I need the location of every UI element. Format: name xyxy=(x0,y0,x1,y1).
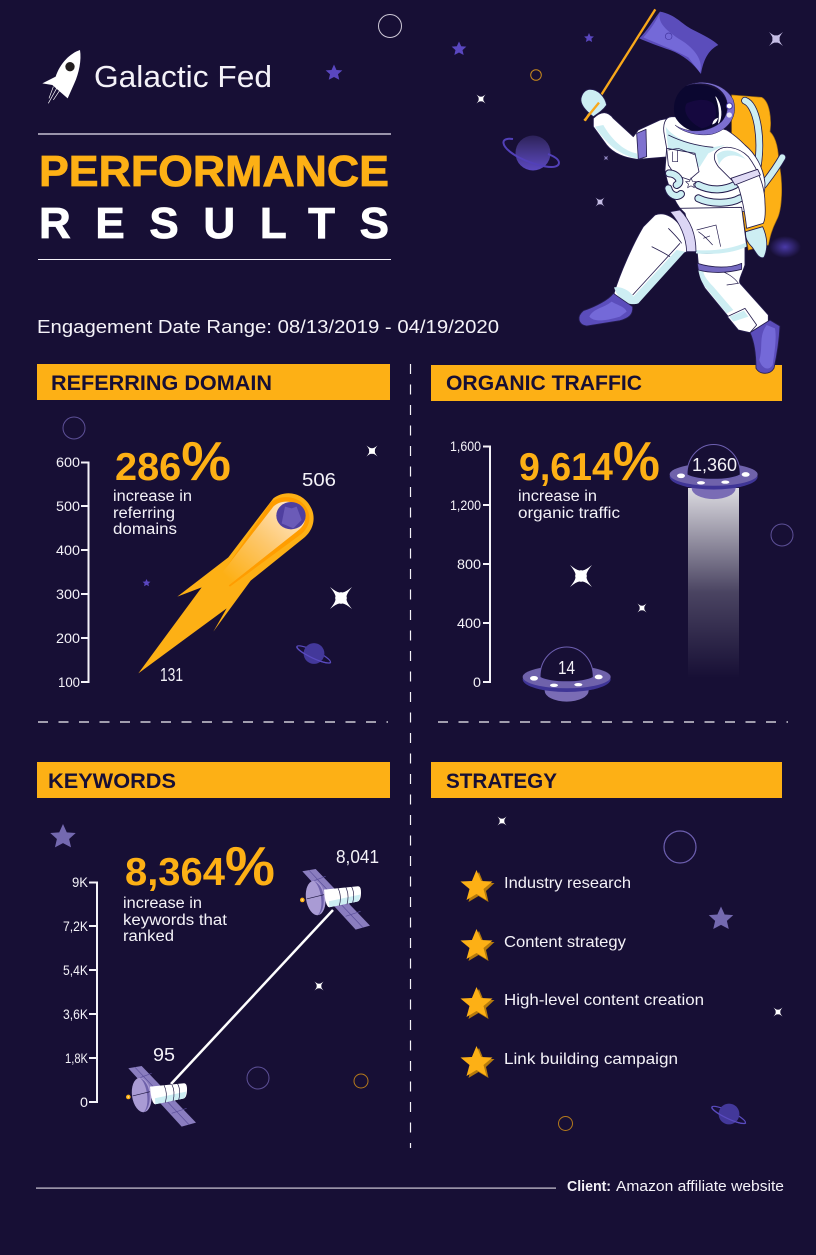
stat caption xyxy=(113,488,192,538)
axis chart: organic traffic: 1,200 xyxy=(450,497,481,513)
upper body xyxy=(581,82,782,250)
axis chart: referring domains: 300 xyxy=(56,586,80,602)
stat caption: increase in xyxy=(518,488,597,505)
axis chart: keywords: 5,4K xyxy=(63,962,89,978)
stat caption: increase in xyxy=(123,895,202,912)
heading: organic traffic xyxy=(431,365,782,401)
icon: satellite low xyxy=(126,1066,196,1127)
decorative rule xyxy=(38,133,391,135)
title: RESULTS xyxy=(39,199,389,248)
raised arm xyxy=(593,113,670,159)
axis chart: organic traffic: 800 xyxy=(457,556,481,572)
strategy item: link building campaign: Link building campaign xyxy=(504,1051,678,1068)
panel: organic traffic xyxy=(431,365,793,702)
title: PERFORMANCE xyxy=(39,147,389,196)
icon: comet xyxy=(138,493,314,673)
flag xyxy=(585,9,718,121)
strategy item: content strategy xyxy=(460,929,626,961)
strategy item: industry research xyxy=(460,870,631,902)
icon: ufo high xyxy=(670,444,758,499)
axis chart: keywords: 0 xyxy=(80,1094,88,1110)
strategy item: industry research: Industry research xyxy=(504,875,631,892)
stat: 9,614%: 9,614% xyxy=(519,430,660,492)
value: 14: 14 xyxy=(558,658,575,678)
icon: ufo low xyxy=(523,647,611,702)
strategy item: content strategy: Content strategy xyxy=(504,934,626,951)
stat caption xyxy=(518,488,620,522)
panel: referring domain xyxy=(37,364,390,690)
knee band xyxy=(670,210,696,252)
heading: strategy: STRATEGY xyxy=(446,770,557,793)
heading: referring domain: REFERRING DOMAIN xyxy=(51,372,272,395)
heading: strategy xyxy=(431,762,782,798)
strategy item: high-level content creation: High-level content creation xyxy=(504,992,704,1009)
backpack tubes xyxy=(745,101,782,185)
stat caption: keywords that xyxy=(123,912,228,929)
footer: client: Amazon affiliate website xyxy=(616,1179,784,1195)
trend line xyxy=(171,910,333,1084)
heading: keywords xyxy=(37,762,390,798)
chest pack xyxy=(667,148,699,180)
panel: strategy xyxy=(431,762,782,1130)
heading: organic traffic: ORGANIC TRAFFIC xyxy=(446,372,642,395)
logo wordmark: Galactic Fed xyxy=(94,59,272,94)
stat caption: ranked xyxy=(123,928,174,945)
space decorations xyxy=(63,417,378,666)
icon: satellite high xyxy=(300,869,370,930)
left glove xyxy=(746,227,767,258)
space decorations xyxy=(570,524,793,612)
engagement date range: Engagement Date Range: 08/13/2019 - 04/19/2020 xyxy=(37,316,499,337)
panel: keywords xyxy=(37,762,390,1127)
backpack xyxy=(732,95,782,250)
stat caption: referring xyxy=(113,505,175,522)
axis chart: referring domains: 100 xyxy=(58,674,80,690)
axis chart: referring domains: 400 xyxy=(56,542,80,558)
axis chart: organic traffic: 400 xyxy=(457,615,481,631)
axis chart: referring domains: 600 xyxy=(56,454,80,470)
strategy item: link building campaign xyxy=(460,1046,678,1078)
footer rule xyxy=(36,1188,556,1189)
value: 8,041: 8,041 xyxy=(336,847,379,867)
shoulder and arm xyxy=(714,147,765,228)
space decorations xyxy=(50,824,368,1089)
axis chart: keywords: 3,6K xyxy=(63,1006,89,1022)
stat: 8,364%: 8,364% xyxy=(125,835,275,897)
pelvis xyxy=(680,207,747,253)
front boot xyxy=(579,293,633,326)
cuff xyxy=(727,308,757,333)
axis chart: referring domains: 500 xyxy=(56,498,80,514)
icon: Galactic Fed logo xyxy=(42,50,272,103)
stat caption: domains xyxy=(113,521,177,538)
back leg xyxy=(697,243,768,333)
heading: referring domain xyxy=(37,364,390,400)
axis chart: keywords: 7,2K xyxy=(63,918,89,934)
chest tubes xyxy=(668,173,740,203)
stat caption: increase in xyxy=(113,488,192,505)
value: 1,360: 1,360 xyxy=(692,455,737,475)
back boot xyxy=(750,320,780,373)
star badge xyxy=(686,178,696,188)
glove xyxy=(581,89,607,117)
axis chart: keywords: 1,8K xyxy=(65,1050,89,1066)
axis chart: organic traffic: 1,600 xyxy=(450,438,481,454)
stat caption xyxy=(123,895,228,945)
shadow blob xyxy=(769,236,801,258)
decorative rule xyxy=(38,259,391,260)
axis chart: organic traffic xyxy=(450,438,490,690)
title xyxy=(39,147,389,248)
space decorations: top xyxy=(326,14,783,206)
axis chart: referring domains: 200 xyxy=(56,630,80,646)
lower body xyxy=(579,207,780,373)
dashed dividers xyxy=(38,364,788,1148)
helmet xyxy=(674,85,728,133)
value: 131: 131 xyxy=(160,665,183,685)
illustration: astronaut with flag xyxy=(579,9,782,373)
heading: keywords: KEYWORDS xyxy=(48,770,176,793)
axis chart: keywords: 9K xyxy=(72,874,89,890)
light beam xyxy=(688,488,739,678)
axis chart: referring domains xyxy=(56,454,88,690)
space decorations xyxy=(498,816,782,1130)
axis chart: keywords xyxy=(63,874,97,1110)
icon: rocket xyxy=(42,50,80,103)
icon: ringed planet xyxy=(503,136,559,170)
value: 95: 95 xyxy=(153,1045,175,1065)
axis chart: organic traffic: 0 xyxy=(473,674,481,690)
torso xyxy=(664,117,765,212)
value: 506: 506 xyxy=(302,470,336,490)
front leg xyxy=(614,214,687,304)
footer: client: Client: xyxy=(567,1179,611,1195)
stat: 286%: 286% xyxy=(115,430,231,492)
strategy item: high-level content creation xyxy=(460,987,704,1019)
stat caption: organic traffic xyxy=(518,505,620,522)
